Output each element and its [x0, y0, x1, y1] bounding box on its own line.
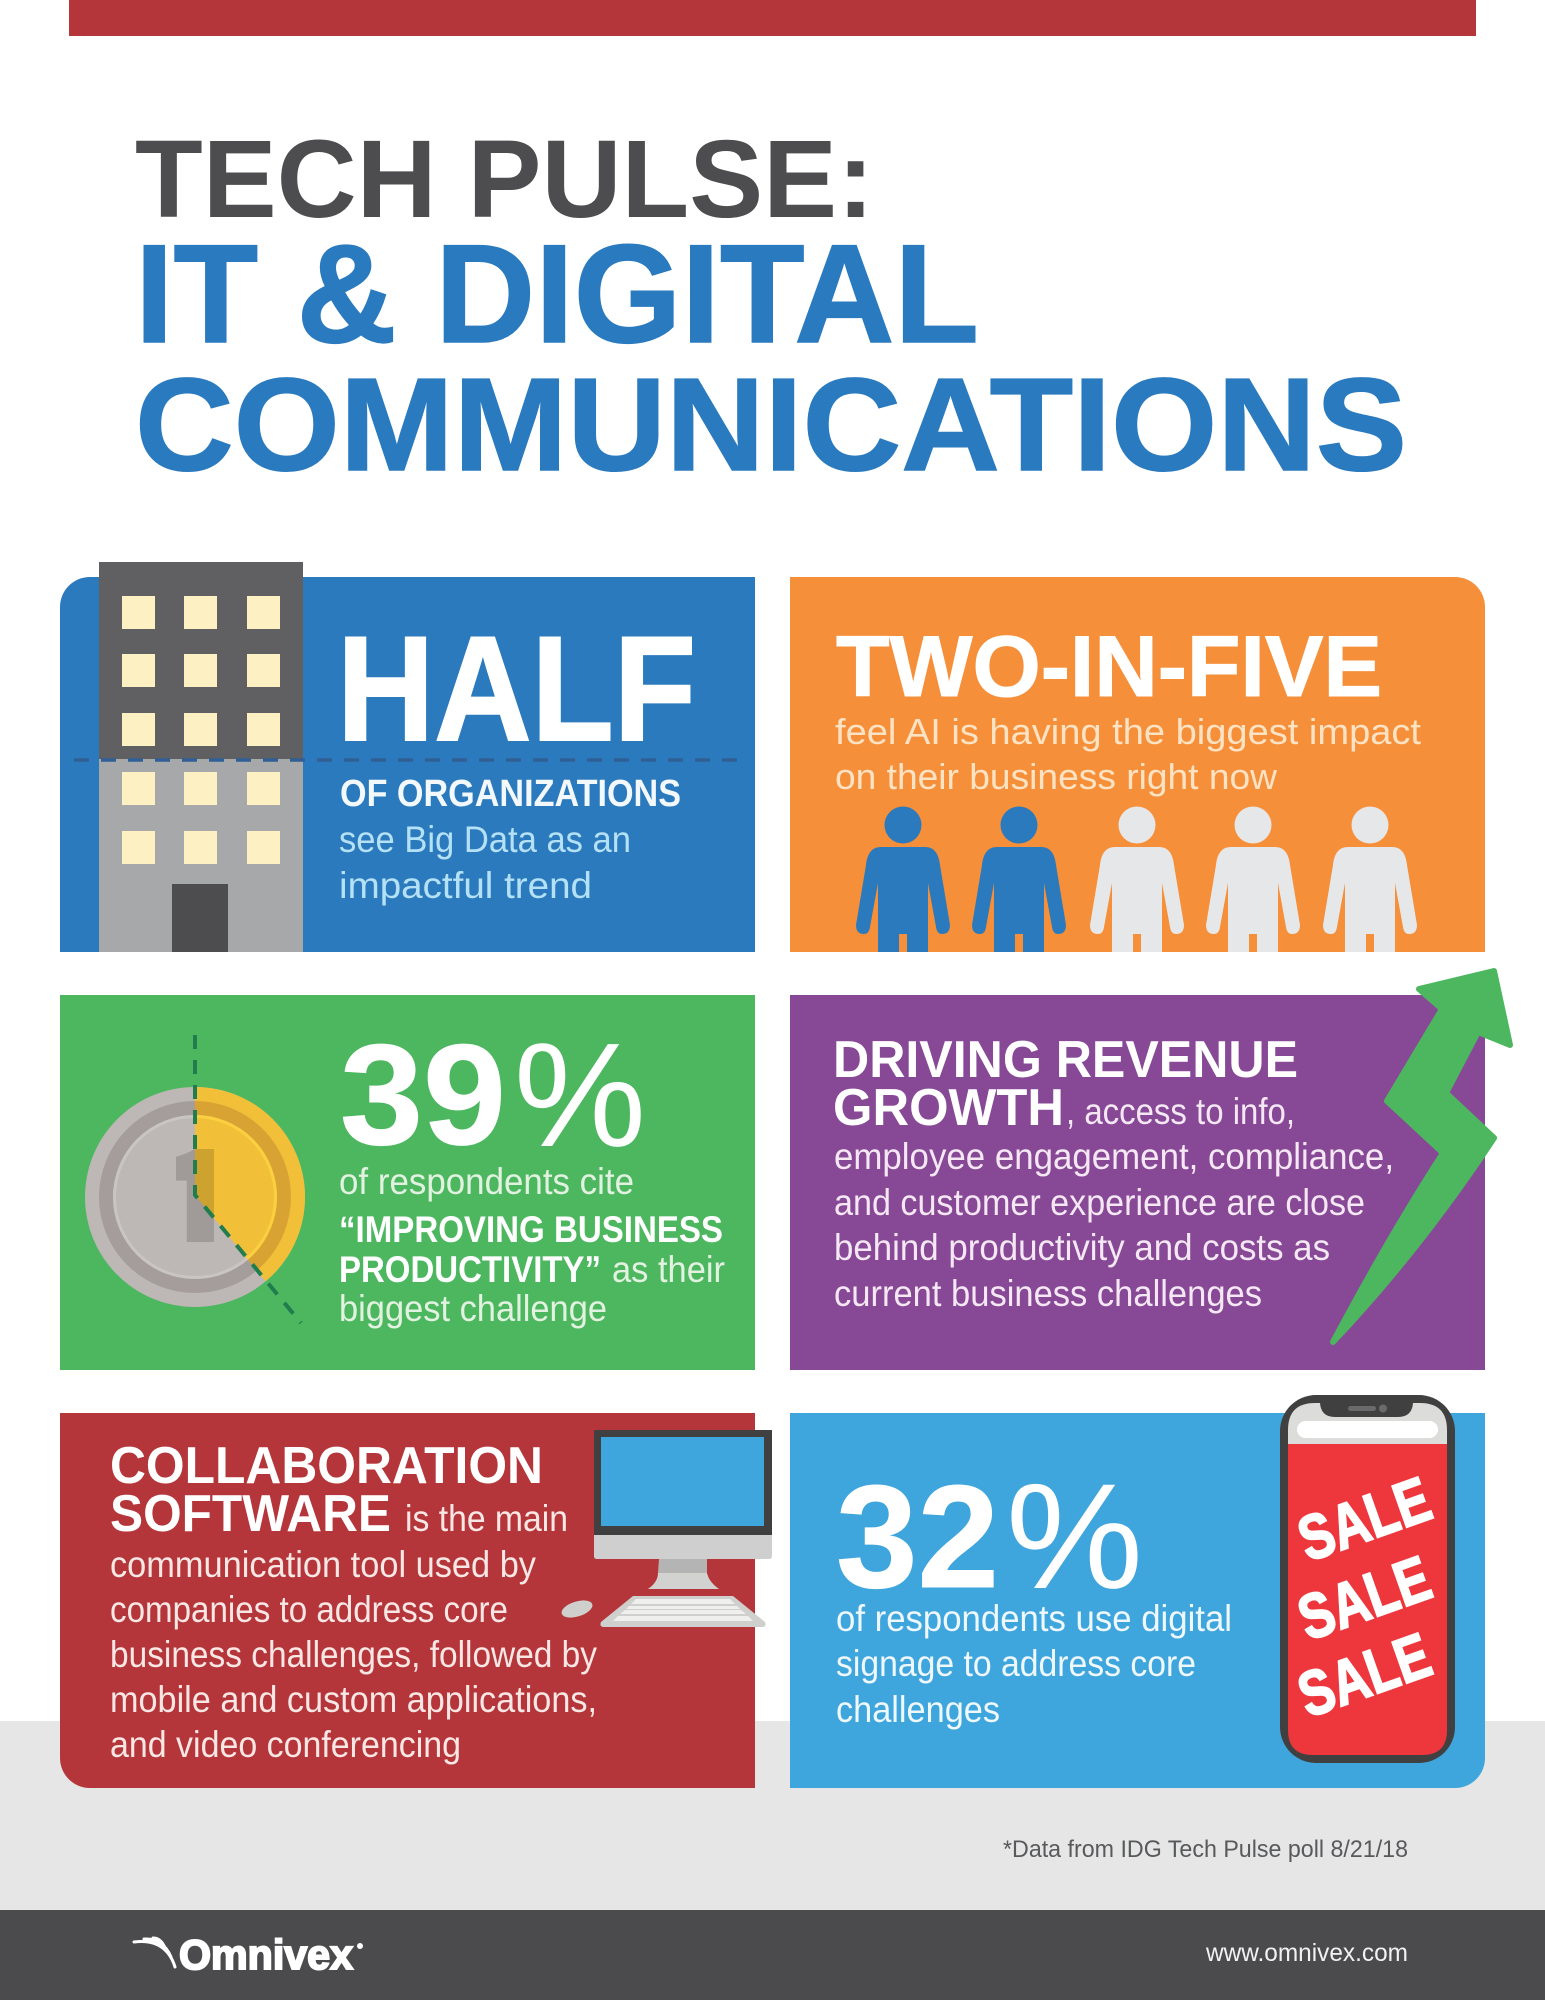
- body text: “IMPROVING BUSINESS: [339, 1209, 723, 1250]
- panel: half of organizations: [60, 562, 755, 952]
- big number: 32: [836, 1455, 999, 1618]
- sale labels: SALE: [1289, 1464, 1440, 1575]
- body text: [110, 1498, 597, 1765]
- heading: COLLABORATION: [110, 1437, 543, 1495]
- body text: of respondents use digital: [836, 1598, 1232, 1639]
- icon: coin with pie wedge: [85, 1035, 305, 1323]
- footer bar: [0, 1910, 1545, 2000]
- body text: current business challenges: [834, 1273, 1262, 1314]
- icon: smartphone with sale: [1280, 1395, 1455, 1763]
- big number: [340, 1013, 646, 1178]
- heading: [110, 1437, 543, 1543]
- body text: on their business right now: [835, 756, 1278, 797]
- logo: Omnivex: [179, 1931, 354, 1978]
- body text: companies to address core: [110, 1589, 508, 1630]
- body text: is the main: [405, 1498, 568, 1539]
- heading: DRIVING REVENUE: [833, 1031, 1298, 1089]
- body text: biggest challenge: [339, 1288, 607, 1329]
- body text: see Big Data as an: [339, 819, 631, 860]
- icon: coin with pie wedge: 1: [153, 1084, 245, 1310]
- body text: feel AI is having the biggest impact: [835, 711, 1421, 752]
- headline: TWO-IN-FIVE: [836, 619, 1382, 715]
- body text: employee engagement, compliance,: [834, 1136, 1394, 1177]
- body text: , access to info,: [1066, 1091, 1295, 1132]
- body text: of respondents cite: [339, 1161, 634, 1202]
- big number: [836, 1452, 1143, 1620]
- icon: five people: [856, 806, 1417, 952]
- heading: [833, 1031, 1298, 1137]
- body text: behind productivity and costs as: [834, 1227, 1330, 1268]
- body text: [339, 1161, 725, 1329]
- body text: impactful trend: [339, 865, 592, 906]
- body text: and video conferencing: [110, 1724, 461, 1765]
- title line 2: IT & DIGITAL: [135, 215, 979, 372]
- body text: [834, 1091, 1394, 1314]
- big number: 39: [340, 1016, 506, 1175]
- footnote: *Data from IDG Tech Pulse poll 8/21/18: [1003, 1836, 1408, 1863]
- sale labels: [1289, 1464, 1440, 1731]
- body text: challenges: [836, 1689, 1000, 1730]
- top red bar: [69, 0, 1476, 36]
- body text: [836, 1598, 1232, 1730]
- title line 1: TECH PULSE:: [135, 118, 874, 241]
- grey lower background band: [0, 1721, 1545, 1910]
- body text: and customer experience are close: [834, 1182, 1365, 1223]
- title line 3: COMMUNICATIONS: [135, 351, 1407, 498]
- body text: PRODUCTIVITY”: [339, 1249, 601, 1290]
- big number: %: [1006, 1452, 1143, 1620]
- big number: %: [514, 1013, 646, 1178]
- icon: desktop computer: [560, 1430, 772, 1627]
- heading: GROWTH: [833, 1079, 1064, 1137]
- body text: business challenges, followed by: [110, 1634, 597, 1675]
- icon: rising arrow: [1333, 971, 1510, 1342]
- body text: [835, 711, 1421, 797]
- subhead: OF ORGANIZATIONS: [340, 773, 681, 815]
- heading: SOFTWARE: [110, 1485, 391, 1543]
- website: www.omnivex.com: [1205, 1939, 1408, 1967]
- panel: driving revenue growth: [790, 971, 1510, 1370]
- icon: office building: [99, 562, 303, 952]
- panel: collaboration software: [60, 1413, 772, 1788]
- panel: 32 percent: [790, 1395, 1485, 1788]
- body text: [339, 819, 631, 906]
- sale labels: SALE: [1289, 1543, 1440, 1654]
- body text: signage to address core: [836, 1643, 1196, 1684]
- body text: communication tool used by: [110, 1544, 536, 1585]
- body text: mobile and custom applications,: [110, 1679, 597, 1720]
- panel: two in five: [790, 577, 1485, 952]
- headline: HALF: [337, 605, 696, 772]
- sale labels: SALE: [1289, 1620, 1440, 1731]
- body text: as their: [612, 1249, 725, 1290]
- panel: 39 percent: [60, 995, 755, 1370]
- title: [135, 118, 1407, 498]
